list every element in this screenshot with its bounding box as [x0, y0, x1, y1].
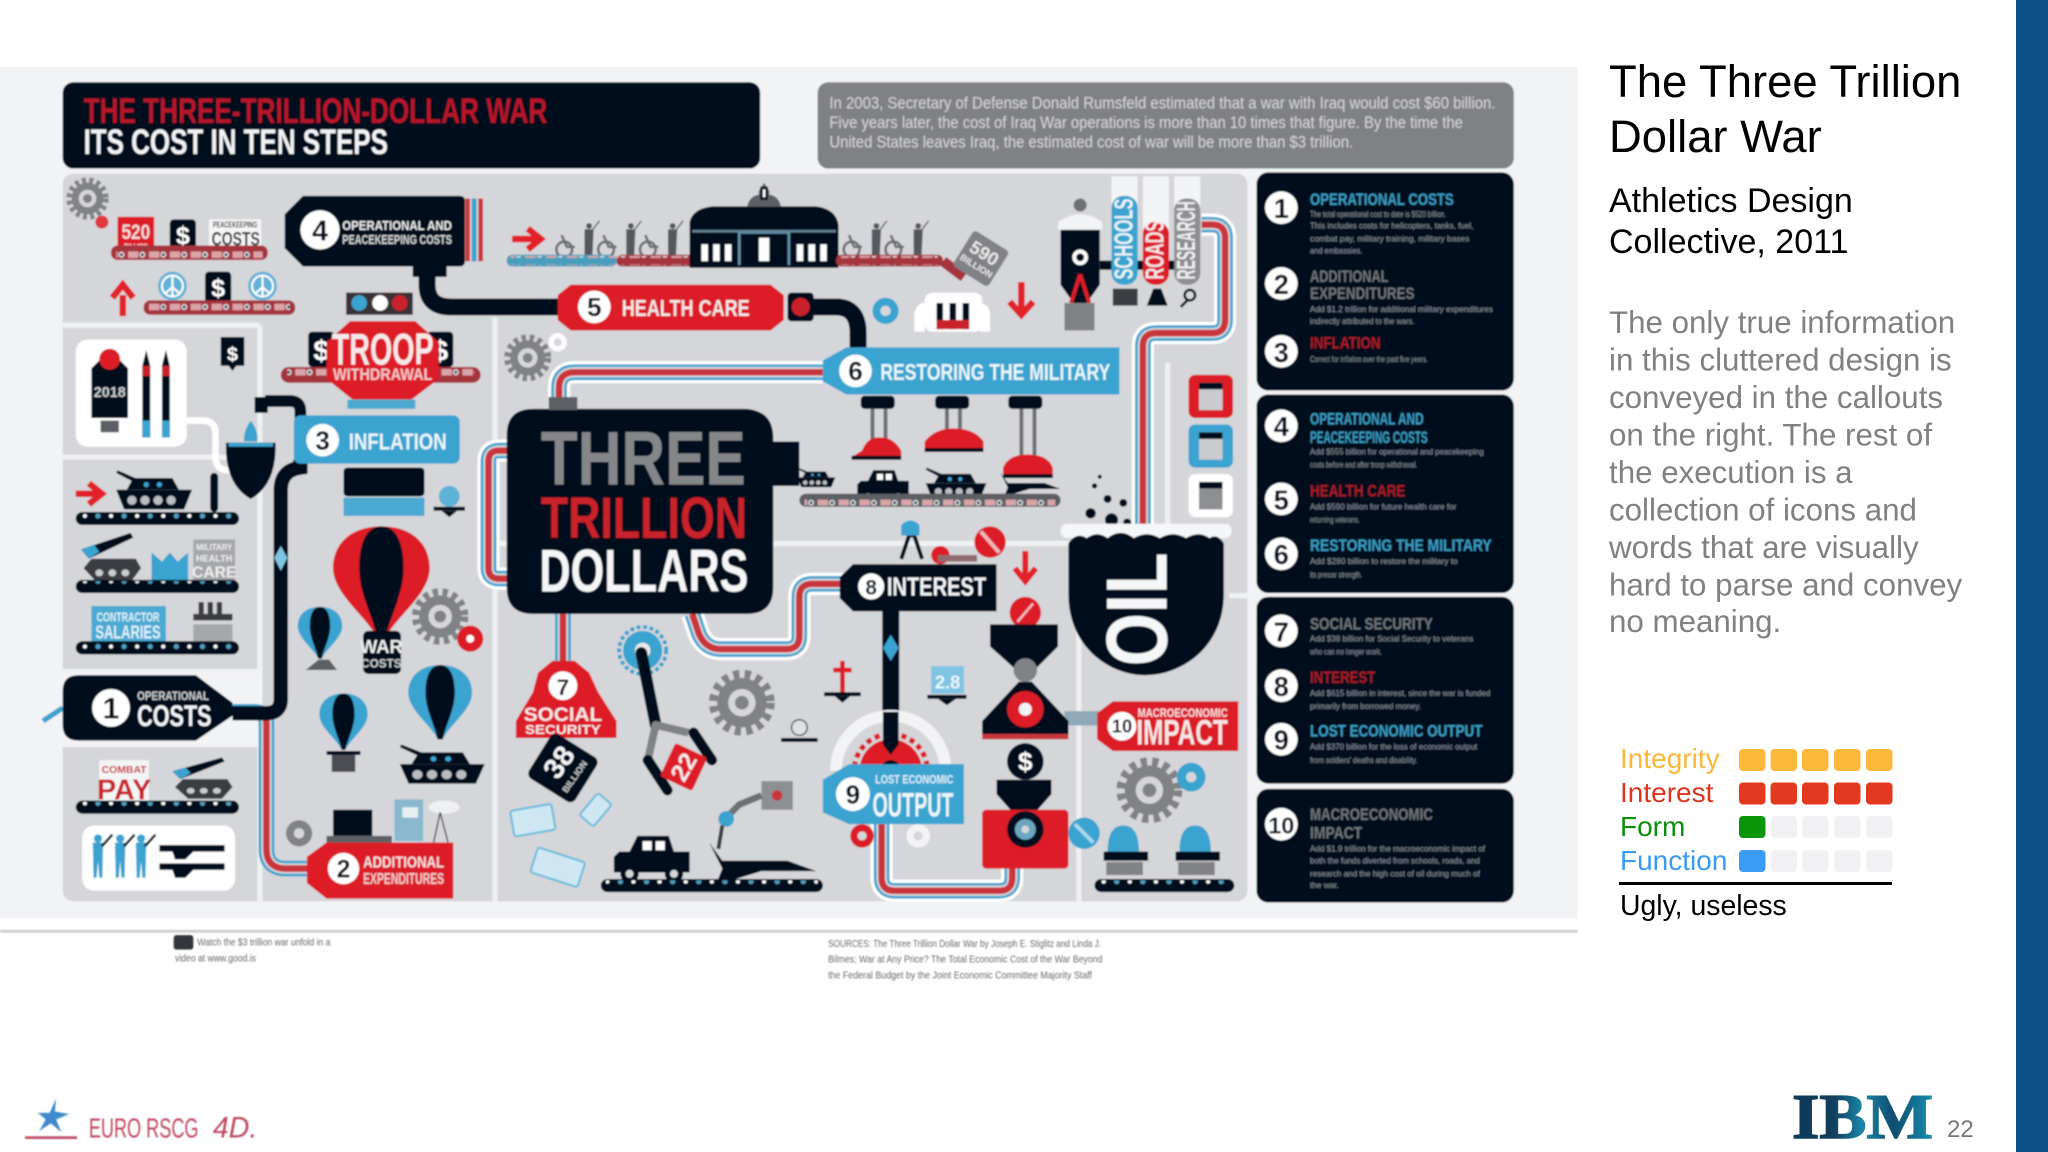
- robot hand, gray box: [718, 781, 793, 849]
- press machine with funnels: $: [1018, 747, 1033, 777]
- combat pay panel: PAY: [97, 774, 151, 806]
- commentary paragraph: on the right. The rest of: [1609, 418, 1932, 452]
- step 10 label: macroeconomic impact: 10: [1112, 716, 1132, 737]
- callout panel: step 10: research and the high cost of oil during much of: [1310, 869, 1481, 878]
- main block: three trillion dollars: [507, 397, 799, 614]
- balloons: [298, 526, 485, 784]
- troop withdrawal: TROOP: [332, 325, 434, 374]
- step 5 label: health care: [558, 285, 899, 330]
- main block: three trillion dollars: TRILLION: [541, 486, 747, 551]
- commentary paragraph: hard to parse and convey: [1609, 568, 1963, 602]
- balloons: COSTS: [361, 657, 402, 670]
- divider under image: [0, 930, 1578, 933]
- commentary paragraph: words that are visually: [1608, 530, 1919, 565]
- callout panel: steps 7 to 9: 8: [1274, 671, 1289, 702]
- icons: top left conveyors: $: [211, 275, 225, 302]
- step 10 label: macroeconomic impact: IMPACT: [1136, 713, 1228, 752]
- callout panel: steps 1 to 3: combat pay, military training, military bases: [1310, 235, 1469, 244]
- humvee and jet conveyor: [601, 836, 823, 892]
- step 9 label: lost economic output: LOST ECONOMIC: [875, 774, 954, 787]
- verdict: [1619, 882, 1892, 922]
- footnote: sources: SOURCES: The Three Trillion Dollar War by Joseph E. Stiglitz and Linda J.: [828, 939, 1101, 950]
- callout panel: steps 1 to 3: OPERATIONAL COSTS: [1310, 190, 1454, 209]
- callout panel: steps 1 to 3: INFLATION: [1310, 334, 1381, 353]
- rating: interest: [1620, 777, 1892, 808]
- callout panel: steps 4 to 6: Add $280 billion to restore the military to: [1310, 557, 1458, 566]
- step 8 label: interest: 8: [865, 576, 877, 599]
- rating: function: [1620, 845, 1892, 876]
- callout panel: steps 1 to 3: [1256, 172, 1514, 391]
- troop withdrawal: $: [432, 335, 448, 367]
- footnote: sources: the Federal Budget by the Joint Economic Committee Majority Staff: [828, 970, 1092, 981]
- step 5 label: health care: 5: [587, 292, 602, 322]
- icons: top left conveyors: COSTS: [212, 229, 260, 251]
- callout panel: steps 1 to 3: and embassies.: [1310, 246, 1362, 255]
- callout panel: step 10: MACROECONOMIC: [1310, 805, 1433, 824]
- step 8 label: interest: INTEREST: [887, 572, 986, 602]
- slide title: Dollar War: [1609, 111, 1822, 162]
- callout panel: steps 7 to 9: 7: [1274, 616, 1289, 647]
- combat pay panel: COMBAT: [102, 765, 147, 776]
- hydraulic presses: [852, 396, 1053, 478]
- callout panel: steps 4 to 6: returning veterans.: [1310, 515, 1360, 524]
- footnote: video: [174, 935, 331, 964]
- footnote: sources: Bilmes; War at Any Price? The Total Economic Cost of the War Beyond: [828, 955, 1103, 966]
- main block: three trillion dollars: THREE: [541, 417, 746, 502]
- step 3 label: inflation: 3: [315, 425, 330, 455]
- combat pay panel: [76, 758, 239, 891]
- step 6 label: restoring the military: 6: [848, 356, 863, 386]
- step 2 label: additional expenditures: [307, 799, 460, 899]
- left column conveyors: HEALTH: [196, 554, 232, 564]
- schools roads research tubes: SCHOOLS: [1108, 199, 1138, 280]
- step 6 label: restoring the military: RESTORING THE MILITARY: [880, 359, 1110, 385]
- callout panel: steps 4 to 6: [1256, 394, 1514, 593]
- callout panel: steps 4 to 6: 4: [1274, 411, 1290, 442]
- commentary paragraph: collection of icons and: [1609, 492, 1917, 528]
- press machine with funnels: [982, 551, 1100, 869]
- icons: top left conveyors: 520: [121, 221, 150, 244]
- icons: top left conveyors: BILLION: [124, 242, 148, 251]
- step 9 label: lost economic output: OUTPUT: [872, 786, 954, 824]
- callout panel: steps 7 to 9: INTEREST: [1310, 668, 1376, 687]
- slide title: The Three Trillion: [1609, 56, 1961, 107]
- rating: function: Function: [1620, 845, 1727, 876]
- page number: 22: [1947, 1116, 1974, 1143]
- callout panel: steps 4 to 6: its prewar strength.: [1310, 570, 1362, 579]
- step 6 label: restoring the military: [823, 347, 1119, 394]
- callout panel: steps 1 to 3: EXPENDITURES: [1310, 284, 1415, 303]
- cross and 2.8 icons: 2.8: [935, 671, 960, 692]
- callout panel: steps 1 to 3: indirectly attributed to the wars.: [1310, 317, 1415, 326]
- mine card: [76, 337, 244, 447]
- commentary paragraph: The only true information: [1609, 305, 1955, 340]
- gears: [70, 181, 1206, 846]
- callout panel: steps 1 to 3: Correct for inflation over the past five years.: [1310, 355, 1428, 364]
- troop withdrawal: [281, 293, 481, 409]
- step 10 label: macroeconomic impact: MACROECONOMIC: [1138, 707, 1228, 720]
- left column conveyors: CARE: [192, 564, 236, 581]
- icons: top left conveyors: PEACEKEEPING: [213, 220, 257, 229]
- rating: interest: Interest: [1620, 777, 1714, 808]
- left column conveyors: CONTRACTOR: [97, 610, 160, 625]
- veterans conveyor and capitol: BILLION: [958, 252, 994, 280]
- slide subtitle: Athletics Design: [1609, 182, 1853, 220]
- footnote: video: video at www.good.is: [175, 953, 256, 964]
- step 10 label: macroeconomic impact: [1097, 701, 1238, 752]
- callout panel: steps 1 to 3: 3: [1274, 337, 1289, 368]
- black pipes: [232, 261, 1191, 716]
- schools roads research tubes: ROADS: [1140, 221, 1170, 280]
- step 1 label: operational costs: OPERATIONAL: [137, 690, 209, 703]
- callout panel: steps 7 to 9: primarily from borrowed money.: [1310, 702, 1421, 711]
- step 3 label: inflation: INFLATION: [349, 428, 447, 454]
- callout panel: steps 7 to 9: 9: [1274, 725, 1289, 756]
- icons: top left conveyors: $: [176, 223, 190, 250]
- callout panel: steps 4 to 6: PEACEKEEPING COSTS: [1310, 428, 1428, 447]
- white bar icon and arrow: [914, 282, 1033, 332]
- callout panel: steps 7 to 9: Add $370 billion for the loss of economic output: [1310, 743, 1478, 752]
- callout panel: steps 7 to 9: [1256, 597, 1514, 784]
- rating legend: [1619, 743, 1892, 922]
- logo: IBM: IBM: [1792, 1081, 1933, 1152]
- striped pipes: [187, 225, 1225, 891]
- step 7 label: social security: 7: [557, 675, 569, 700]
- step 3 label: inflation: [294, 415, 465, 517]
- callout panel: steps 7 to 9: Add $38 billion for Social Security to veterans: [1310, 634, 1473, 643]
- step 4 label: operational and peacekeeping costs: OPERATIONAL AND: [342, 218, 452, 233]
- step 1 label: operational costs: COSTS: [137, 700, 212, 733]
- callout panel: step 10: Add $1.9 trillion for the macroeconomic impact of: [1310, 845, 1486, 854]
- robot arm and 22 tag: [619, 627, 712, 791]
- step 4 label: operational and peacekeeping costs: 4: [312, 215, 328, 247]
- step 2 label: additional expenditures: EXPENDITURES: [363, 871, 444, 888]
- callout panel: steps 1 to 3: This includes costs for helicopters, tanks, fuel,: [1310, 222, 1473, 231]
- callout panel: steps 1 to 3: 2: [1274, 269, 1289, 300]
- callout panel: steps 1 to 3: ADDITIONAL: [1310, 267, 1388, 286]
- mine card: 2018: [94, 385, 126, 401]
- step 5 label: health care: HEALTH CARE: [622, 295, 750, 321]
- logo: Euro RSCG 4D: 4D.: [213, 1112, 257, 1145]
- left column conveyors: SALARIES: [95, 622, 161, 643]
- commentary paragraph: in this cluttered design is: [1609, 342, 1952, 378]
- rating: form: [1620, 811, 1892, 842]
- slide subtitle: Collective, 2011: [1609, 223, 1848, 261]
- main block: three trillion dollars: DOLLARS: [539, 538, 748, 605]
- callout panel: steps 7 to 9: Add $615 billion in interest, since the war is funded: [1310, 689, 1490, 698]
- logo: Euro RSCG 4D: [25, 1098, 257, 1145]
- commentary paragraph: [1608, 305, 1963, 639]
- oil vat: OIL: [1089, 552, 1185, 666]
- faucet and bowl: [226, 397, 280, 499]
- footnote: sources: [828, 939, 1103, 981]
- step 9 label: lost economic output: [823, 712, 964, 848]
- troop withdrawal: $: [313, 335, 329, 367]
- callout panel: steps 7 to 9: LOST ECONOMIC OUTPUT: [1310, 722, 1483, 741]
- step 1 label: operational costs: [43, 675, 232, 741]
- callout panel: steps 4 to 6: Add $555 billion for operational and peacekeeping: [1310, 448, 1484, 457]
- step 7 label: social security: SOCIAL: [524, 704, 602, 726]
- callout panel: steps 1 to 3: 1: [1274, 193, 1289, 224]
- step 2 label: additional expenditures: 2: [337, 857, 350, 884]
- veterans conveyor and capitol: 590: [966, 236, 1003, 270]
- callout panel: steps 4 to 6: RESTORING THE MILITARY: [1310, 536, 1492, 555]
- robot arm and 22 tag: 22: [666, 749, 703, 786]
- callout panel: steps 7 to 9: who can no longer work.: [1309, 647, 1382, 656]
- oil vat: [1061, 475, 1232, 675]
- balloons: WAR: [360, 636, 403, 657]
- left column conveyors: [76, 470, 239, 654]
- schools roads research tubes: [1058, 176, 1201, 330]
- intro text panel: [818, 82, 1514, 168]
- callout panel: step 10: IMPACT: [1310, 824, 1363, 843]
- callout panel: steps 1 to 3: The total operational cost to date is $520 billion.: [1310, 210, 1446, 219]
- step 4 label: operational and peacekeeping costs: PEACEKEEPING COSTS: [342, 232, 452, 247]
- social security tickets: [510, 793, 612, 887]
- callout panel: step 10: the war.: [1310, 881, 1339, 890]
- rating: integrity: [1620, 743, 1892, 774]
- step 7 label: social security: BILLION: [560, 759, 589, 795]
- callout panel: step 10: [1256, 789, 1514, 903]
- step 2 label: additional expenditures: ADDITIONAL: [363, 854, 444, 871]
- intro text panel: Five years later, the cost of Iraq War operations is more than 10 times that figure. By the time the: [829, 113, 1463, 132]
- step 7 label: social security: SECURITY: [525, 722, 601, 737]
- gray panels behind the diagram: [57, 174, 1249, 901]
- commentary paragraph: no meaning.: [1609, 604, 1781, 639]
- commentary paragraph: the execution is a: [1609, 455, 1853, 490]
- mine card: $: [227, 343, 238, 365]
- rating: integrity: Integrity: [1620, 743, 1720, 774]
- small stacked boxes: [1189, 375, 1233, 517]
- callout panel: steps 1 to 3: Add $1.2 trillion for additional military expenditures: [1310, 305, 1493, 314]
- step 7 label: social security: [516, 661, 616, 805]
- title panel: ITS COST IN TEN STEPS: [84, 123, 388, 162]
- slide title: [1609, 56, 1961, 162]
- blue side bar: [2016, 0, 2048, 1152]
- icons: top left conveyors: [111, 217, 295, 316]
- left column conveyors: MILITARY: [196, 543, 233, 552]
- step 9 label: lost economic output: 9: [846, 779, 860, 809]
- callout panel: steps 7 to 9: SOCIAL SECURITY: [1310, 615, 1433, 634]
- footnote: video: Watch the $3 trillion war unfold in a: [197, 938, 331, 949]
- callout panel: steps 7 to 9: from soldiers' deaths and disability.: [1310, 756, 1417, 765]
- step 1 label: operational costs: 1: [103, 692, 119, 725]
- schools roads research tubes: RESEARCH: [1171, 201, 1201, 280]
- commentary paragraph: conveyed in the callouts: [1609, 380, 1943, 415]
- title panel: [63, 82, 760, 168]
- domed trucks conveyor: [1095, 825, 1234, 892]
- slide subtitle: [1609, 182, 1853, 261]
- callout panel: step 10: both the funds diverted from schools, roads, and: [1310, 856, 1480, 865]
- troop withdrawal: WITHDRAWAL: [333, 365, 432, 384]
- title panel: THE THREE-TRILLION-DOLLAR WAR: [84, 92, 547, 131]
- callout panel: step 10: 10: [1268, 812, 1294, 838]
- vehicles conveyor: [797, 468, 1061, 507]
- callout panel: steps 4 to 6: 5: [1274, 484, 1289, 515]
- callout panel: steps 4 to 6: OPERATIONAL AND: [1310, 409, 1424, 428]
- rating: form: Form: [1620, 811, 1685, 842]
- step 7 label: social security: 38: [537, 740, 582, 785]
- callout panel: steps 4 to 6: costs before and after troop withdrawal.: [1310, 461, 1417, 470]
- step 8 label: interest: [274, 546, 997, 661]
- tower and pills: [901, 520, 1006, 564]
- intro text panel: In 2003, Secretary of Defense Donald Rumsfeld estimated that a war with Iraq would cost $60 billion.: [829, 93, 1496, 112]
- intro text panel: United States leaves Iraq, the estimated cost of war will be more than $3 trillion.: [829, 133, 1353, 152]
- image background: [0, 67, 1578, 918]
- verdict: Ugly, useless: [1620, 890, 1787, 922]
- step 4 label: operational and peacekeeping costs: [285, 196, 481, 277]
- callout panel: steps 4 to 6: HEALTH CARE: [1310, 481, 1405, 500]
- callout panel: steps 4 to 6: 6: [1274, 539, 1289, 570]
- veterans conveyor and capitol: [507, 183, 1010, 287]
- callout panel: steps 4 to 6: Add $590 billion for future health care for: [1310, 502, 1457, 511]
- logo: Euro RSCG 4D: EURO RSCG: [89, 1113, 199, 1144]
- cross and 2.8 icons: [781, 661, 967, 742]
